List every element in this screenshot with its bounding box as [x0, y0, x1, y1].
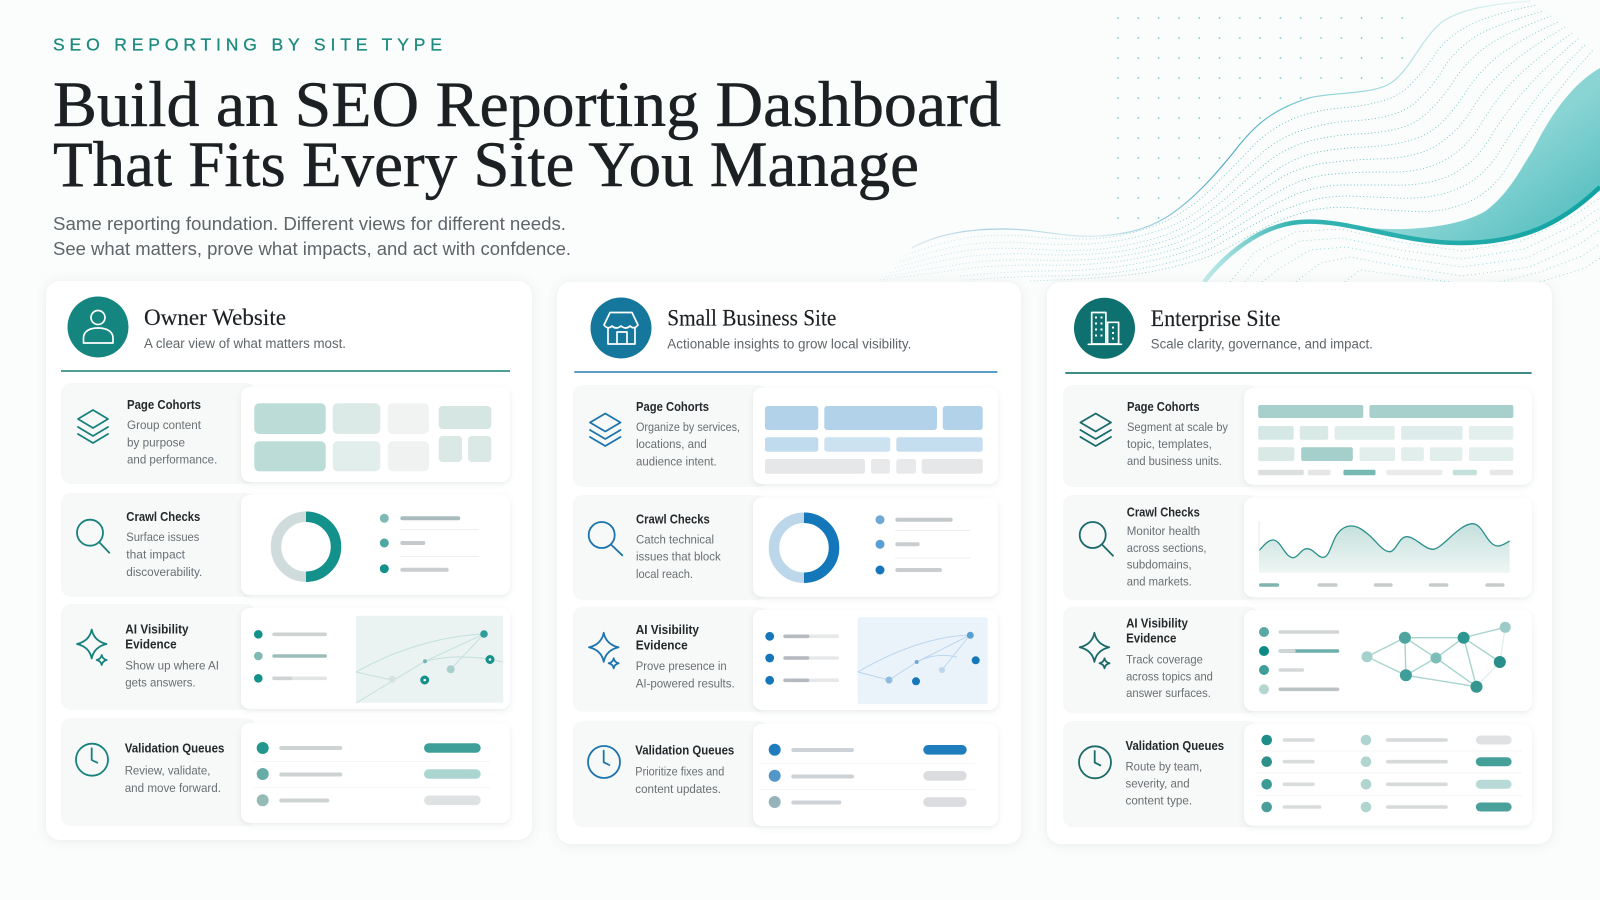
heading: enterprise site: Enterprise Site	[1151, 306, 1280, 331]
text: crawl checks: Surface issues	[126, 530, 199, 544]
text: validation queues: Route by team,	[1126, 759, 1202, 773]
text: page cohorts	[1127, 400, 1229, 468]
text: crawl checks	[636, 512, 721, 581]
chart: queue list	[241, 723, 510, 823]
text: ai visibility: Evidence	[1126, 632, 1176, 646]
text: ai visibility	[1126, 616, 1213, 700]
text: page cohorts: by purpose	[127, 435, 185, 449]
text: crawl checks: and markets.	[1127, 575, 1192, 589]
chart: donut	[753, 498, 998, 597]
text: ai visibility: AI Visibility	[636, 623, 699, 637]
text: validation queues	[1126, 739, 1224, 808]
chart: cohort blocks	[753, 388, 998, 484]
text: crawl checks: Crawl Checks	[1127, 506, 1200, 520]
icon: person	[68, 296, 128, 358]
text: page cohorts	[127, 398, 217, 467]
heading: small business site: Small Business Site	[667, 306, 836, 331]
decorative wave graphic	[880, 1, 1600, 282]
icon: magnifier	[77, 520, 109, 553]
text: crawl checks: issues that block	[636, 550, 721, 564]
icon: sparkle	[589, 633, 619, 668]
icon: magnifier	[1080, 522, 1113, 556]
icon: sparkle	[77, 630, 107, 665]
text: page cohorts	[636, 400, 740, 468]
icon: sparkle	[1080, 633, 1110, 668]
text: validation queues	[635, 744, 734, 796]
row: ai visibility	[1063, 607, 1532, 713]
row: crawl checks	[1063, 495, 1532, 600]
panel: small business site	[557, 282, 1021, 844]
row: validation queues	[61, 718, 510, 826]
icon: buildings	[1074, 298, 1135, 359]
chart: queue table	[1244, 724, 1532, 826]
text: crawl checks: discoverability.	[126, 565, 202, 579]
title: Build an SEO Reporting Dashboard	[53, 69, 1001, 141]
chart: queue list	[753, 724, 998, 826]
text: validation queues: and move forward.	[125, 781, 221, 795]
subtitle: See what matters, prove what impacts, and act with confdence.	[53, 238, 571, 259]
text: ai visibility: Evidence	[125, 637, 177, 651]
row: validation queues	[573, 721, 998, 827]
text: ai visibility: AI-powered results.	[636, 676, 735, 690]
text: page cohorts: Page Cohorts	[127, 398, 201, 412]
icon: clock	[76, 744, 108, 776]
chart: topic network	[1244, 610, 1532, 711]
title	[53, 69, 1001, 201]
text: validation queues	[125, 742, 224, 795]
row: crawl checks	[61, 493, 510, 597]
text: crawl checks: Crawl Checks	[126, 510, 200, 524]
eyebrow: SEO REPORTING BY SITE TYPE	[53, 34, 442, 54]
icon: layers	[78, 410, 108, 443]
text: page cohorts: and performance.	[127, 453, 217, 467]
text: ai visibility	[636, 623, 735, 690]
text: crawl checks: Monitor health	[1127, 524, 1200, 538]
row: ai visibility	[61, 604, 510, 710]
icon: layers	[1080, 414, 1111, 446]
row: page cohorts	[1063, 385, 1532, 487]
text: crawl checks: subdomains,	[1127, 558, 1192, 572]
subtitle	[53, 213, 571, 259]
text: ai visibility: answer surfaces.	[1126, 686, 1211, 700]
panel: owner website	[46, 281, 532, 840]
text: ai visibility	[125, 622, 219, 690]
text: ai visibility: Track coverage	[1126, 652, 1203, 666]
text: page cohorts: Organize by services,	[636, 420, 740, 434]
tagline: A clear view of what matters most.	[144, 336, 346, 351]
text: page cohorts: topic, templates,	[1127, 437, 1212, 451]
text: ai visibility: Prove presence in	[636, 659, 727, 673]
text: crawl checks	[126, 510, 202, 579]
row: page cohorts	[573, 385, 998, 487]
text: validation queues: severity, and	[1126, 777, 1190, 791]
text: validation queues: Validation Queues	[635, 744, 734, 758]
chart: donut	[241, 495, 510, 595]
row: crawl checks	[573, 495, 998, 600]
icon: clock	[1079, 746, 1111, 778]
text: page cohorts: Segment at scale by	[1127, 420, 1229, 434]
text: page cohorts: and business units.	[1127, 454, 1222, 468]
text: ai visibility: gets answers.	[125, 676, 196, 690]
text: crawl checks: Crawl Checks	[636, 512, 710, 526]
row: ai visibility	[573, 607, 998, 712]
text: validation queues: Prioritize fixes and	[635, 764, 724, 778]
text: crawl checks: Catch technical	[636, 532, 714, 546]
text: validation queues: content type.	[1126, 794, 1192, 808]
text: ai visibility: AI Visibility	[1126, 616, 1188, 630]
text: crawl checks: local reach.	[636, 567, 693, 581]
row: page cohorts	[61, 383, 510, 484]
title: That Fits Every Site You Manage	[53, 129, 919, 201]
icon: storefront	[590, 298, 652, 358]
text: crawl checks	[1127, 506, 1206, 589]
chart: cohort blocks	[1244, 388, 1532, 485]
row: validation queues	[1063, 721, 1532, 827]
text: ai visibility: Show up where AI	[125, 658, 219, 672]
chart: evidence map	[241, 608, 510, 709]
text: page cohorts: audience intent.	[636, 454, 717, 468]
subtitle: Same reporting foundation. Different views for different needs.	[53, 213, 566, 234]
text: crawl checks: across sections,	[1127, 541, 1206, 555]
text: page cohorts: Page Cohorts	[636, 400, 709, 414]
tagline: Actionable insights to grow local visibility.	[667, 336, 911, 351]
text: validation queues: content updates.	[635, 782, 721, 796]
text: page cohorts: Page Cohorts	[1127, 400, 1200, 414]
tagline: Scale clarity, governance, and impact.	[1151, 336, 1373, 351]
chart: evidence map	[753, 610, 998, 710]
chart: cohort blocks	[241, 387, 510, 482]
text: validation queues: Review, validate,	[125, 763, 210, 777]
text: ai visibility: across topics and	[1126, 669, 1213, 683]
icon: magnifier	[589, 522, 622, 555]
icon: layers	[590, 414, 620, 446]
text: page cohorts: Group content	[127, 418, 202, 432]
panel: enterprise site	[1047, 282, 1552, 844]
chart: area trend	[1244, 498, 1532, 597]
text: ai visibility: AI Visibility	[125, 622, 189, 636]
icon: clock	[588, 746, 620, 778]
text: ai visibility: Evidence	[636, 638, 688, 652]
text: validation queues: Validation Queues	[125, 742, 224, 756]
text: page cohorts: locations, and	[636, 437, 707, 451]
heading: owner website: Owner Website	[144, 305, 286, 330]
text: crawl checks: that impact	[126, 547, 186, 561]
text: validation queues: Validation Queues	[1126, 739, 1224, 753]
